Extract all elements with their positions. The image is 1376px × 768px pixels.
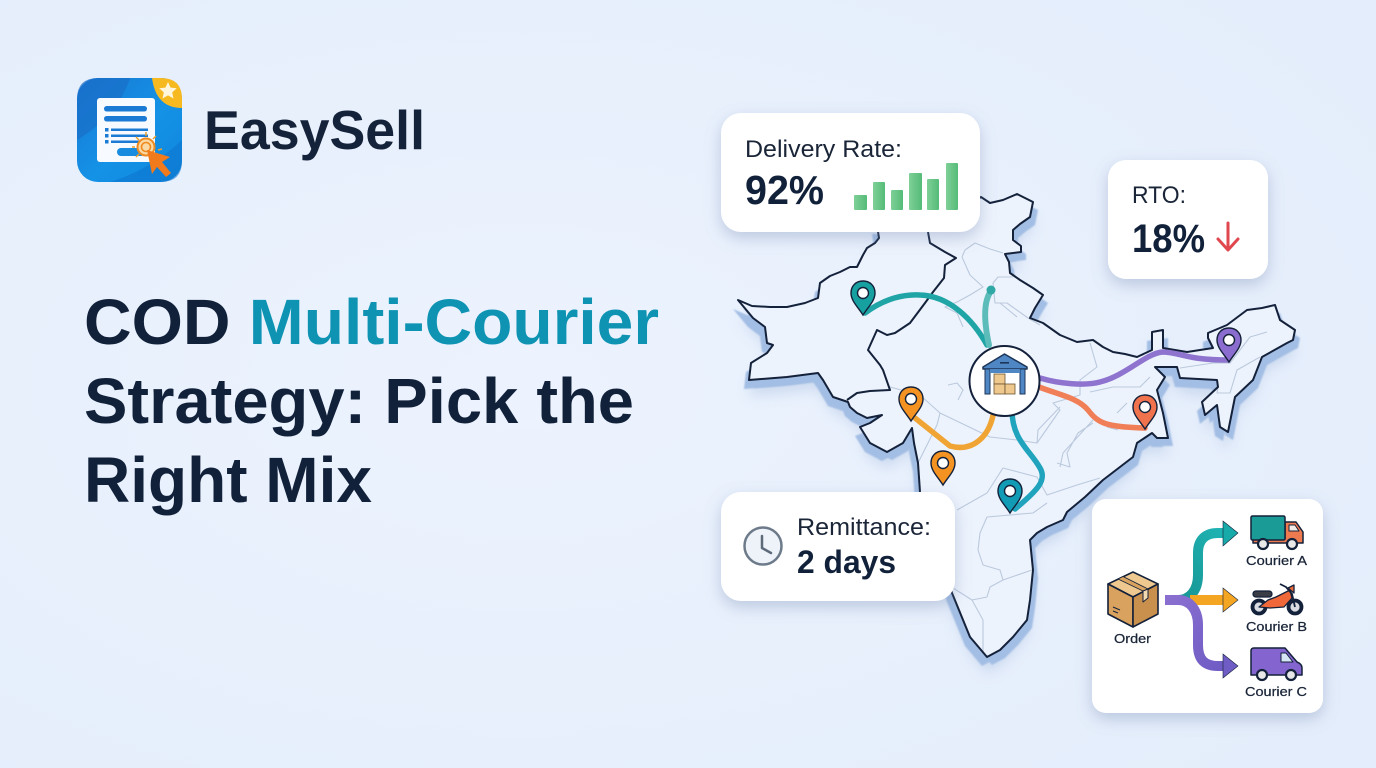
brand name: EasySell bbox=[204, 99, 425, 161]
pin: west-central bbox=[931, 451, 955, 485]
bar chart bbox=[854, 163, 958, 210]
pin: north-west bbox=[851, 281, 875, 315]
label: order: Order bbox=[1114, 631, 1152, 646]
icon: clock bbox=[744, 528, 782, 564]
icon: parcel box bbox=[1108, 572, 1158, 627]
arrow: to courier C bbox=[1165, 600, 1238, 678]
arrow: to courier B bbox=[1190, 588, 1238, 612]
location pins bbox=[851, 281, 1241, 513]
card: courier routing bbox=[1092, 499, 1323, 713]
warehouse hub bbox=[970, 346, 1040, 416]
card: RTO bbox=[1108, 160, 1268, 279]
arrow: to courier A bbox=[1165, 521, 1238, 600]
label: remittance: Remittance: bbox=[797, 514, 931, 541]
map of India bbox=[733, 194, 1300, 673]
icon: van bbox=[1251, 648, 1302, 680]
label: courier B: Courier B bbox=[1246, 619, 1307, 634]
card: delivery rate bbox=[721, 113, 980, 232]
value: 2 days: 2 days bbox=[797, 544, 896, 580]
title: COD Multi-Courier bbox=[84, 286, 659, 358]
routes bbox=[865, 286, 1228, 509]
icon: down arrow bbox=[1218, 223, 1238, 250]
pin: south-central bbox=[998, 479, 1022, 513]
value: 92%: 92% bbox=[745, 167, 824, 213]
label: courier C: Courier C bbox=[1245, 684, 1307, 699]
icon: truck bbox=[1251, 516, 1303, 549]
pin: east bbox=[1133, 395, 1157, 429]
label: RTO: RTO: bbox=[1132, 182, 1186, 209]
value: 18%: 18% bbox=[1132, 217, 1205, 261]
pin: west bbox=[899, 387, 923, 421]
card: remittance bbox=[721, 492, 955, 601]
title: Strategy: Pick the bbox=[84, 365, 634, 437]
label: delivery rate: Delivery Rate: bbox=[745, 136, 902, 163]
logo icon bbox=[77, 78, 182, 182]
title bbox=[84, 286, 659, 516]
title: Right Mix bbox=[84, 444, 372, 516]
pin: north-east bbox=[1217, 328, 1241, 362]
icon: motorbike bbox=[1252, 584, 1302, 614]
label: courier A: Courier A bbox=[1246, 553, 1307, 568]
